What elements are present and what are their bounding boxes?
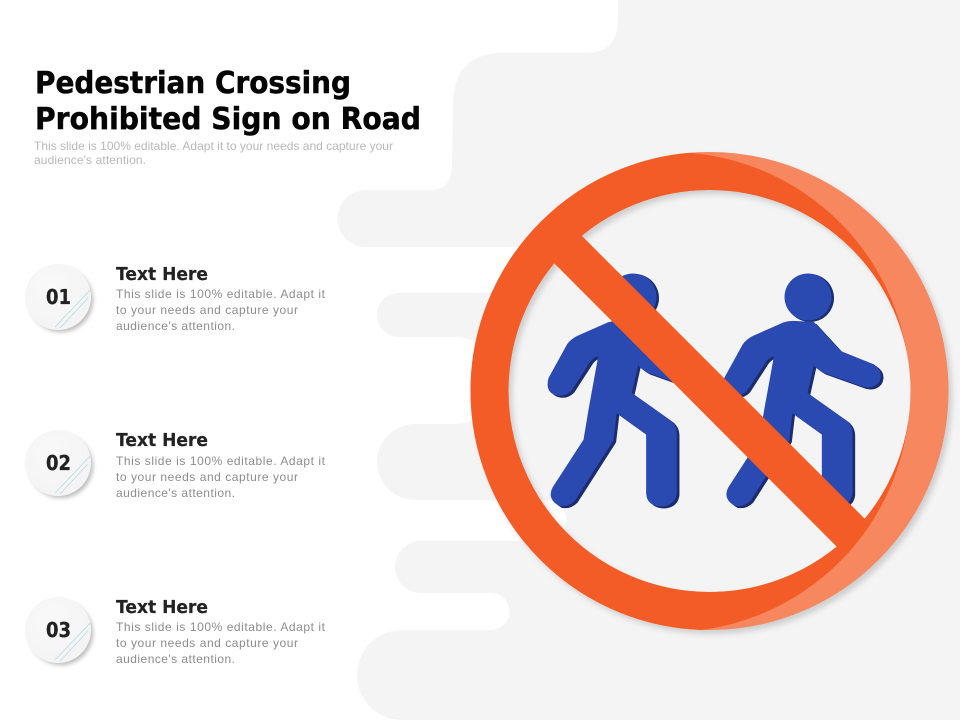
badge 02: 02	[46, 451, 71, 475]
item 01 heading: Text Here	[116, 265, 208, 285]
prohibition sign	[490, 171, 933, 615]
subtitle text: audience's attention.	[34, 153, 146, 167]
item 01 body text: audience's attention.	[116, 319, 235, 333]
badge 03: 03	[46, 618, 71, 642]
title: Pedestrian Crossing	[35, 66, 351, 101]
item 02 body text: to your needs and capture your	[116, 470, 298, 484]
ring light rim	[490, 171, 930, 611]
badge 01	[25, 264, 94, 332]
left pedestrian	[548, 274, 707, 508]
item 01 body text: to your needs and capture your	[116, 303, 298, 317]
title: Prohibited Sign on Road	[35, 102, 421, 137]
item 03	[25, 597, 326, 666]
background blob shape	[338, 0, 960, 720]
item 02 body text: This slide is 100% editable. Adapt it	[116, 454, 326, 468]
title	[35, 66, 421, 137]
item 02 body text: audience's attention.	[116, 486, 235, 500]
subtitle text: This slide is 100% editable. Adapt it to your needs and capture your	[34, 139, 393, 153]
badge 02	[25, 430, 94, 498]
item 01 body text: This slide is 100% editable. Adapt it	[116, 287, 326, 301]
badge 01: 01	[46, 285, 71, 309]
item 02	[25, 430, 326, 500]
item 03 body text: to your needs and capture your	[116, 636, 298, 650]
item 03 body text: audience's attention.	[116, 652, 235, 666]
right pedestrian	[724, 274, 883, 508]
item 01 body text	[116, 287, 326, 333]
item 03 body text: This slide is 100% editable. Adapt it	[116, 620, 326, 634]
badge 03	[25, 597, 94, 665]
item 03 heading: Text Here	[116, 598, 208, 618]
item 03 body text	[116, 620, 326, 666]
item 02 body text	[116, 454, 326, 500]
ring shadow	[493, 175, 933, 615]
ring front and diagonal bar	[490, 171, 930, 611]
subtitle text	[34, 139, 393, 167]
item 01	[25, 264, 326, 333]
item 02 heading: Text Here	[116, 431, 208, 451]
